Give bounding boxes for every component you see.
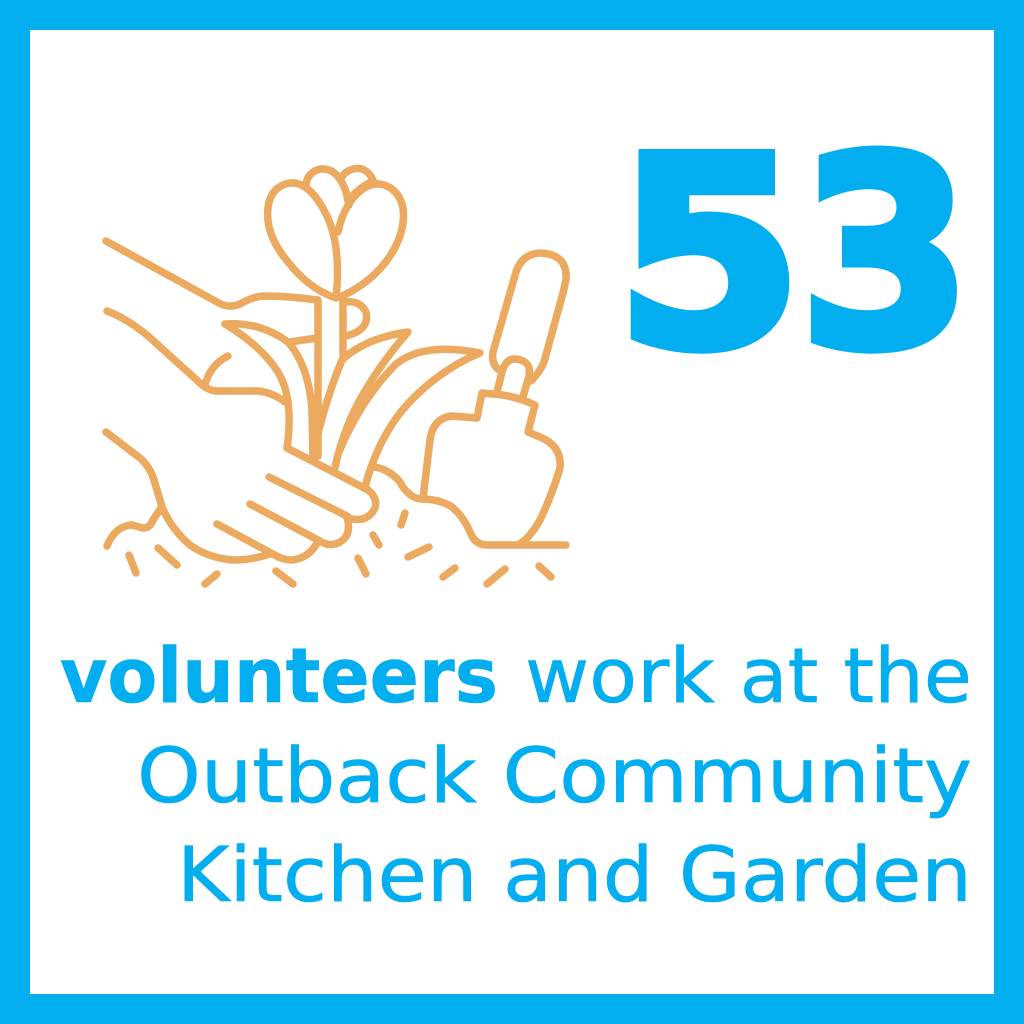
- big number 53: 3: [799, 102, 972, 407]
- icon: hands planting a flower with a trowel: [106, 168, 566, 584]
- big number 53: 5: [615, 102, 803, 407]
- lower hand: [106, 432, 376, 560]
- caption line 1: volunteers: [60, 631, 498, 720]
- trowel: [423, 253, 566, 545]
- leaves: [225, 324, 480, 487]
- caption line 1: work at the: [525, 631, 972, 720]
- caption line 3: Kitchen and Garden: [177, 830, 972, 919]
- caption line 2: Outback Community: [137, 731, 972, 820]
- flower head: [268, 168, 404, 298]
- soil dashes: [129, 513, 551, 584]
- soil and ground: [107, 467, 566, 546]
- upper arm and hand: [106, 241, 367, 402]
- flower stem: [318, 298, 343, 456]
- caption text: [60, 631, 972, 919]
